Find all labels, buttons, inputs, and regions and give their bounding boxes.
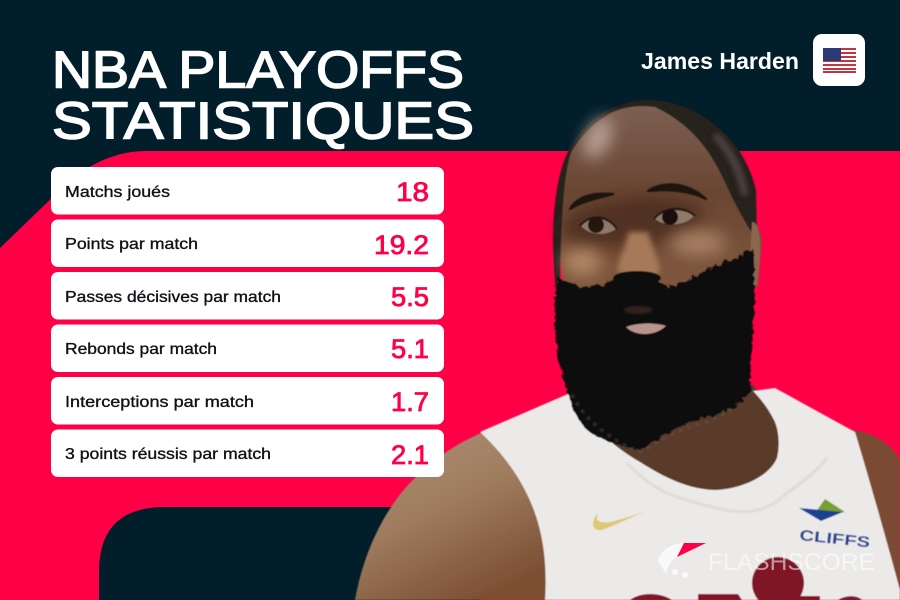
braids highlight — [715, 135, 745, 195]
row: passes decisives par match — [51, 272, 444, 320]
red panel — [0, 151, 900, 600]
nose — [613, 232, 661, 285]
row: matchs joues — [51, 167, 444, 214]
stat table — [51, 167, 444, 477]
row: 3 points reussis par match: 3 points réussis par match — [65, 446, 271, 463]
left eyebrow — [570, 194, 613, 209]
row: rebonds par match: 5.1 — [391, 334, 429, 364]
flashscore watermark — [658, 543, 875, 578]
row: points par match: 19.2 — [374, 230, 429, 260]
eye socket shadow — [558, 191, 706, 253]
jersey ball graphic — [752, 557, 804, 600]
hair — [553, 100, 757, 290]
row: points par match: Points par match — [65, 236, 198, 253]
jersey collar shading — [627, 458, 827, 512]
row: points par match — [51, 220, 444, 267]
nike swoosh — [593, 505, 664, 530]
row: matchs joues: Matchs joués — [65, 184, 170, 201]
row: rebonds par match — [51, 324, 444, 372]
flag tile — [813, 34, 865, 86]
right eyebrow — [648, 184, 706, 199]
player photo — [355, 100, 900, 600]
mouth — [624, 306, 666, 334]
dark rounded block bottom — [99, 507, 480, 600]
right eye — [654, 209, 695, 225]
cliffs logo — [799, 499, 871, 551]
neck — [570, 380, 785, 500]
cliffs wordmark: CLIFFS — [799, 527, 871, 551]
jersey lettering — [630, 594, 862, 600]
row: passes decisives par match: 5.5 — [391, 282, 429, 312]
title line 1: NBA PLAYOFFS — [52, 42, 464, 100]
row: passes decisives par match: Passes décisives par match — [65, 289, 281, 306]
jersey — [480, 388, 900, 600]
player name: James Harden — [641, 48, 799, 74]
forehead highlight — [578, 113, 618, 163]
cheek light left — [562, 249, 602, 275]
row: 3 points reussis par match: 2.1 — [391, 440, 429, 470]
head skin — [556, 103, 762, 300]
watermark icon — [658, 543, 706, 578]
watermark wordmark: FLASHSCORE — [708, 549, 875, 576]
left eye — [580, 217, 617, 234]
left arm — [355, 432, 565, 600]
beard — [555, 248, 754, 450]
beard fringe — [572, 395, 742, 452]
row: interceptions par match — [51, 377, 444, 424]
ear — [748, 222, 760, 290]
right arm — [850, 430, 900, 600]
row: 3 points reussis par match — [51, 430, 444, 477]
cheek light right — [670, 230, 726, 256]
title line 2: STATISTIQUES — [52, 92, 474, 150]
row: matchs joues: 18 — [396, 177, 429, 207]
row: rebonds par match: Rebonds par match — [65, 341, 217, 358]
row: interceptions par match: Interceptions par match — [65, 394, 254, 411]
row: interceptions par match: 1.7 — [391, 387, 429, 417]
icon: US flag — [823, 48, 856, 73]
title — [52, 42, 474, 150]
